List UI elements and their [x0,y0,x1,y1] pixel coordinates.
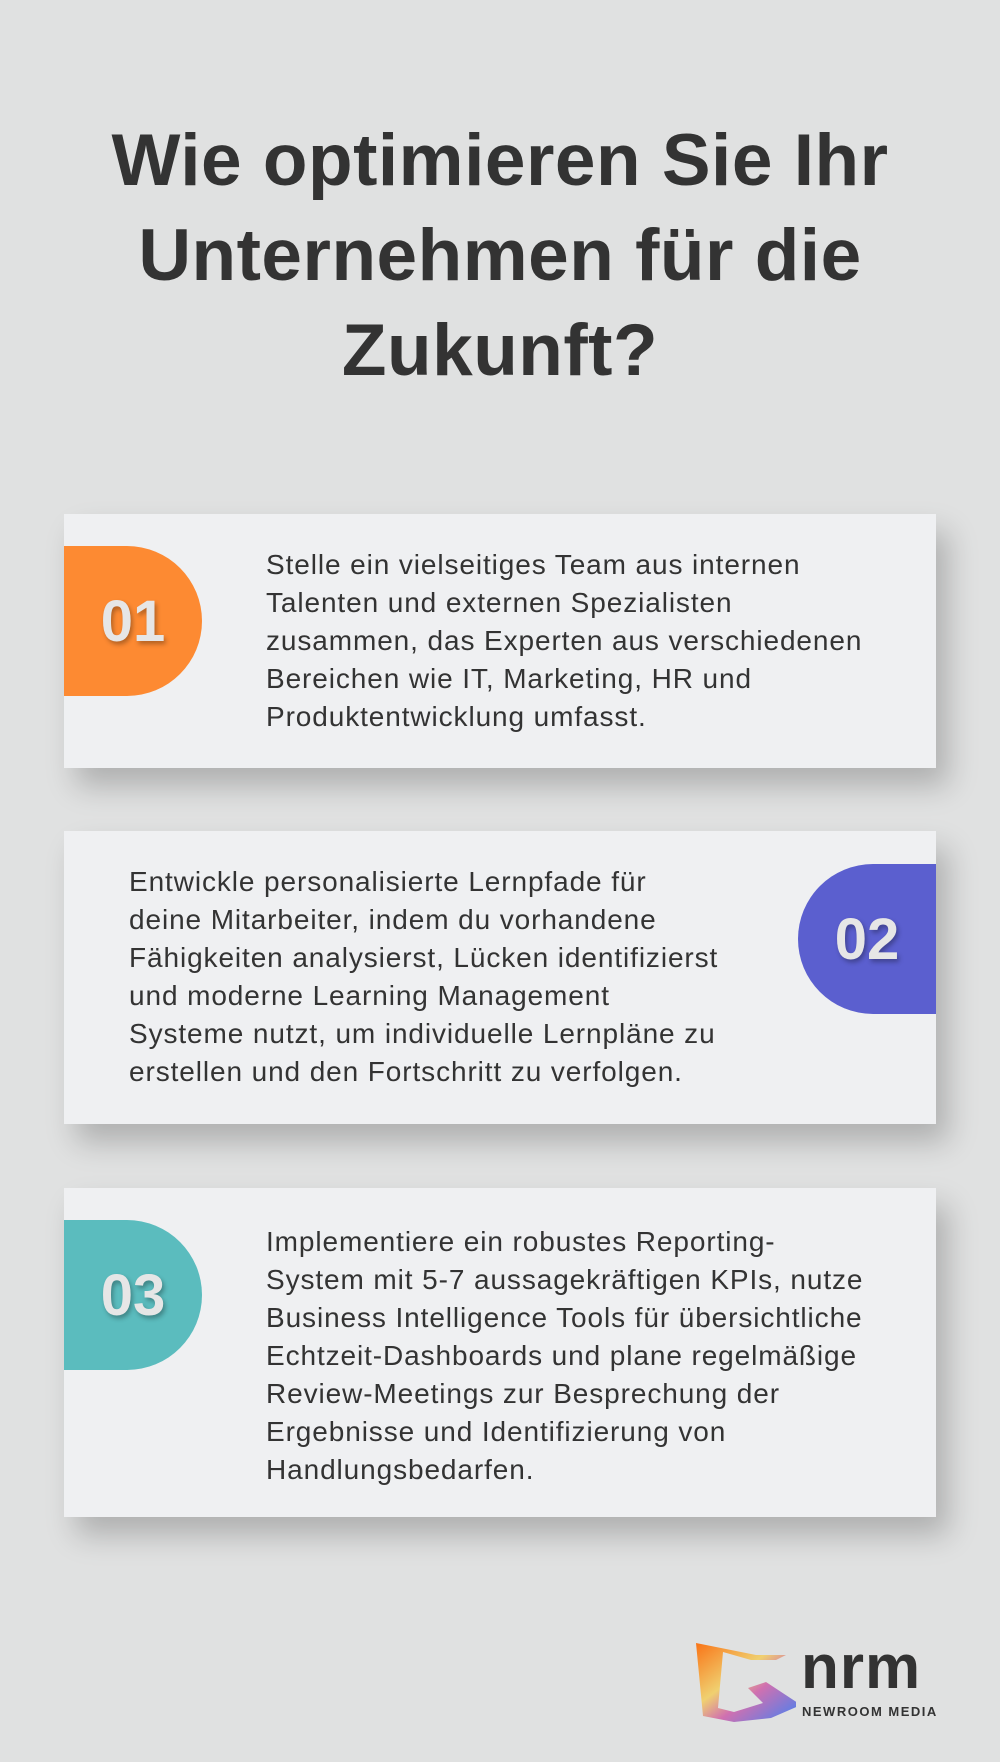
badge 03: 03 [101,1262,165,1328]
text 02: Entwickle personalisierte Lernpfade für [129,866,647,897]
text 01: Talenten und externen Spezialisten [266,587,732,618]
title: Unternehmen für die [138,215,862,296]
panel: step 03 [64,1188,936,1517]
text 01: Produktentwicklung umfasst. [266,701,647,732]
text 01: zusammen, das Experten aus verschiedenen [266,625,862,656]
panel: step 02 [64,831,936,1124]
text 03: Echtzeit-Dashboards und plane regelmäßige [266,1340,857,1371]
text 03: Ergebnisse und Identifizierung von [266,1416,726,1447]
text 03 [266,1226,863,1485]
text 02 [129,866,718,1087]
logo [696,1633,938,1722]
text 01: Bereichen wie IT, Marketing, HR und [266,663,752,694]
text 03: Review-Meetings zur Besprechung der [266,1378,780,1409]
badge 01: 01 [101,588,165,654]
text 03: Implementiere ein robustes Reporting- [266,1226,776,1257]
title: Zukunft? [342,310,658,391]
text 01 [266,549,862,732]
badge 01 [64,546,202,696]
logo: NEWROOM MEDIA [802,1704,938,1719]
text 03: Handlungsbedarfen. [266,1454,534,1485]
text 03: Business Intelligence Tools für übersichtliche [266,1302,863,1333]
title: Wie optimieren Sie Ihr [111,120,888,201]
text 02: deine Mitarbeiter, indem du vorhandene [129,904,657,935]
text 02: Systeme nutzt, um individuelle Lernpläne zu [129,1018,716,1049]
text 02: Fähigkeiten analysierst, Lücken identifizierst [129,942,718,973]
text 02: erstellen und den Fortschritt zu verfolgen. [129,1056,683,1087]
badge 03 [64,1220,202,1370]
text 03: System mit 5-7 aussagekräftigen KPIs, nutze [266,1264,863,1295]
text 01: Stelle ein vielseitiges Team aus internen [266,549,800,580]
icon: logo mark [696,1643,796,1722]
badge 02: 02 [835,906,899,972]
badge 02 [798,864,936,1014]
text 02: und moderne Learning Management [129,980,610,1011]
title [111,120,888,391]
brand name: nrm [801,1633,921,1702]
panel: step 01 [64,514,936,768]
